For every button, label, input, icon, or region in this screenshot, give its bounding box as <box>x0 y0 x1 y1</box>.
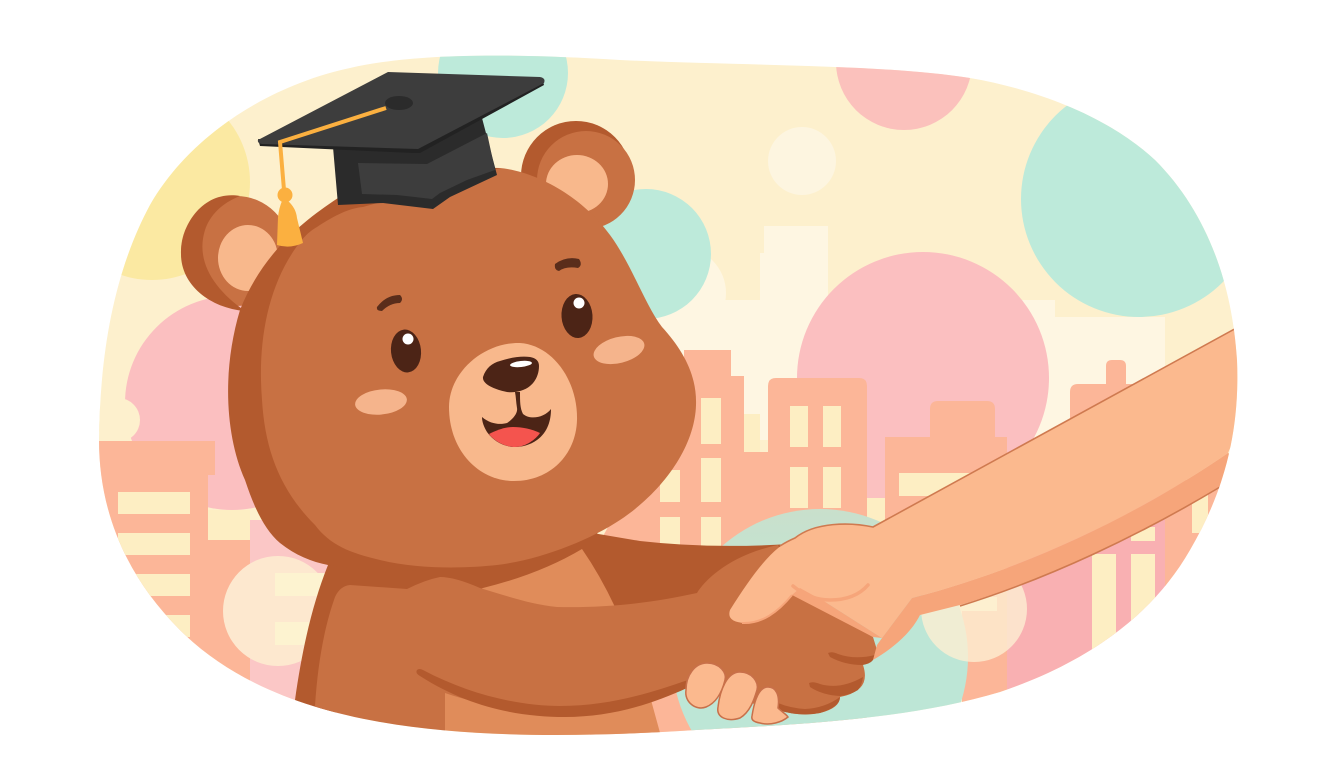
human fingers <box>686 663 788 724</box>
cheek blushes <box>354 331 647 417</box>
bear head <box>228 168 696 571</box>
cap button <box>385 96 413 110</box>
pale circle with windows, left <box>223 556 333 666</box>
background circles <box>121 56 1224 317</box>
cap rim <box>258 78 544 153</box>
arm outlines <box>780 326 1240 546</box>
arm shadow <box>873 453 1240 660</box>
bear ear right <box>521 121 635 231</box>
thumb shadow <box>742 595 792 623</box>
arm groove <box>416 669 688 717</box>
eyes and brows <box>377 258 594 374</box>
cap body <box>333 118 497 209</box>
pale city skyline <box>634 226 1165 440</box>
cap panel <box>358 133 495 199</box>
bear far arm <box>591 534 781 606</box>
graduation cap <box>258 72 544 247</box>
bear ear left <box>181 195 291 311</box>
pink circles <box>125 252 1049 510</box>
bear torso <box>290 520 662 740</box>
mint circle behind hands <box>676 509 968 730</box>
background blob <box>99 56 1238 735</box>
tassel <box>277 108 386 247</box>
paw creases <box>828 652 875 665</box>
peach buildings <box>99 350 1240 760</box>
muzzle, nose and mouth <box>449 343 577 481</box>
building windows <box>118 398 1208 654</box>
bear near arm and paw <box>315 545 877 740</box>
lower pink backdrop <box>240 480 1167 720</box>
palm crease <box>793 585 868 600</box>
human arm and hand <box>729 326 1242 660</box>
pale circle, right <box>921 568 1027 662</box>
illustration: graduate bear handshake <box>99 56 1238 735</box>
cap board <box>258 72 544 149</box>
palm band <box>792 588 882 638</box>
mint circle behind bear <box>603 189 711 318</box>
